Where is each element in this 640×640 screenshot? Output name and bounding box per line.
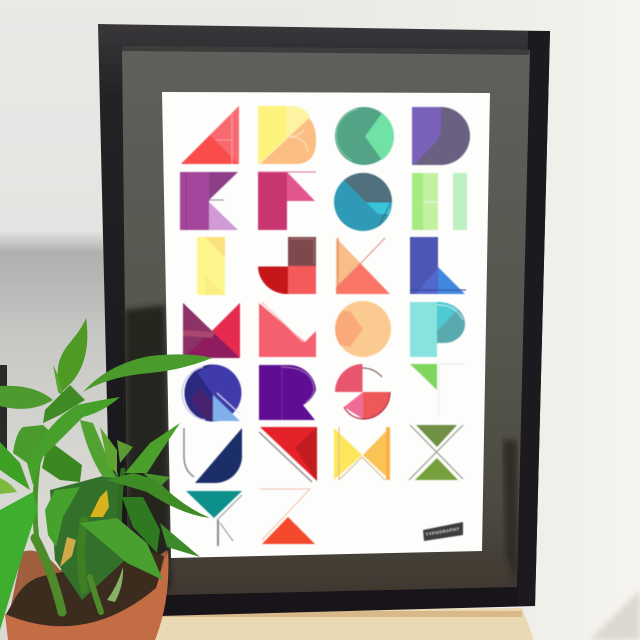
small light leaf — [107, 567, 123, 602]
leaf: centre back — [42, 440, 82, 482]
leaf: left upper — [0, 386, 53, 409]
plant stems — [35, 450, 123, 612]
plant in terracotta pot — [0, 318, 212, 640]
publisher logo badge: TYPOGRAPHY — [425, 526, 460, 537]
leaf: left cluster — [13, 425, 53, 465]
letter H — [412, 173, 467, 230]
letter I — [197, 237, 225, 295]
pot back and soil — [5, 550, 167, 629]
letter Y — [186, 491, 242, 546]
letter B — [258, 106, 316, 164]
mat board — [122, 46, 530, 596]
letter A — [178, 105, 239, 164]
letter P — [410, 302, 465, 357]
letter X — [409, 425, 463, 480]
publisher logo badge — [423, 522, 463, 541]
letter D — [412, 107, 470, 165]
wooden shelf — [150, 608, 534, 640]
letter C — [335, 107, 394, 165]
leaf: mid cluster — [43, 385, 85, 423]
letter K — [336, 238, 390, 294]
terracotta pot — [5, 550, 168, 640]
picture frame — [98, 24, 550, 616]
letter V — [259, 427, 317, 482]
letter E — [180, 172, 238, 230]
letter N — [259, 302, 316, 357]
leaf: far lower right — [160, 523, 200, 557]
leaf: diagonal bright — [27, 397, 120, 485]
letter U — [184, 428, 242, 483]
letter W — [334, 427, 390, 480]
letter T — [410, 364, 464, 416]
yellow leaf — [90, 490, 109, 517]
letter G — [334, 173, 392, 231]
leaf: large lower — [80, 518, 163, 580]
leaf: left bright — [0, 442, 30, 490]
leaf: right pointing — [125, 423, 180, 473]
letter O — [335, 301, 391, 357]
leaf: lower right — [122, 497, 160, 553]
letter Q — [182, 364, 242, 422]
leaf: long upper — [83, 354, 212, 392]
letter Z — [260, 489, 315, 544]
leaf: lower centre — [45, 487, 80, 547]
letter S — [335, 364, 390, 419]
letter R — [259, 365, 316, 420]
leaf: centre — [80, 420, 116, 478]
letter M — [183, 303, 240, 358]
alphabet — [178, 105, 470, 546]
plant core — [50, 472, 125, 600]
letter J — [258, 237, 316, 294]
letter F — [258, 172, 316, 230]
letter L — [410, 237, 466, 294]
poster — [162, 92, 490, 558]
leaf: stub right — [143, 473, 170, 487]
leaf: top — [58, 318, 87, 392]
leaf: long right — [107, 473, 210, 518]
leaf: large foreground — [0, 492, 37, 630]
